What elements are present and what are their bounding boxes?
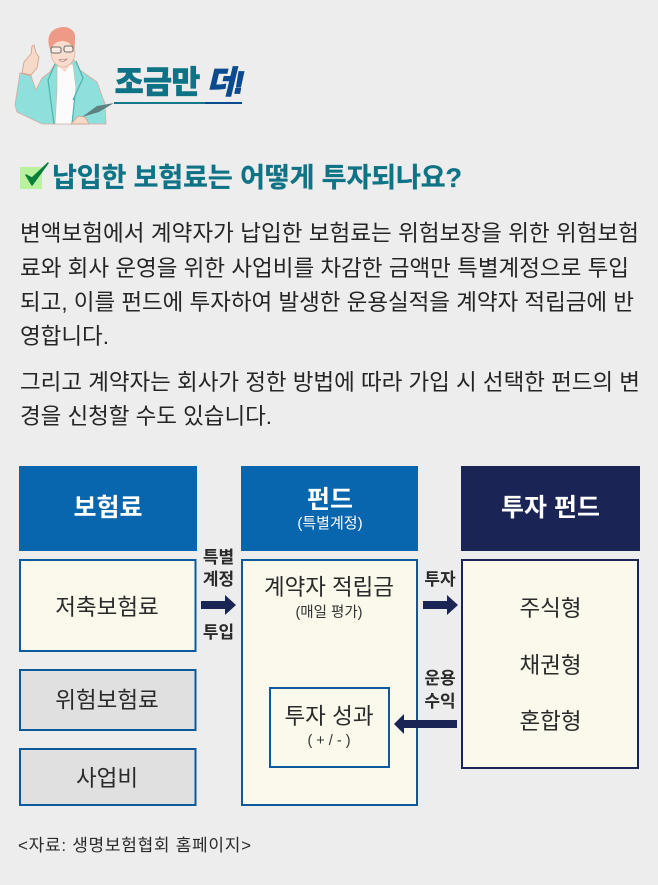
box: 투자 성과: 투자 성과 — [284, 704, 374, 729]
arrow: returns — [394, 714, 457, 734]
text block: paragraph 1: 료와 회사 운영을 위한 사업비를 차감한 금액만 특별계정으로 투입 — [20, 256, 629, 281]
label: 운용수익: 운용 — [424, 669, 456, 688]
box: 투자 성과: ( + / - ) — [307, 733, 351, 749]
header: 보험료 — [19, 466, 197, 551]
box: 저축보험료 — [20, 560, 196, 651]
header: 펀드: 펀드 — [307, 486, 353, 514]
arrow: to investment funds — [423, 595, 458, 615]
header: 펀드: (특별계정) — [297, 515, 363, 532]
label: 운용수익: 수익 — [424, 692, 456, 711]
box: 투자 성과 — [270, 688, 389, 767]
icon: green check mark — [20, 163, 48, 189]
box: 투자 펀드 종류: 채권형 — [519, 653, 582, 678]
box: 위험보험료 — [20, 670, 196, 730]
header: 펀드 — [241, 466, 418, 551]
label: 특별계정: 특별 — [203, 548, 234, 567]
box: 사업비: 사업비 — [76, 766, 138, 791]
text block: paragraph 1: 변액보험에서 계약자가 납입한 보험료는 위험보장을 위한 위험보험 — [20, 221, 639, 246]
box: 계약자 적립금 — [242, 560, 417, 805]
text block: paragraph 2 — [20, 370, 640, 429]
source note: <자료: 생명보험협회 홈페이지> — [18, 836, 251, 855]
title: 조금만 더! — [114, 65, 244, 104]
label: 특별계정 — [203, 548, 234, 589]
title: 조금만 더!: 조금만 — [115, 65, 200, 100]
icon: man pointing with tablet — [15, 27, 114, 124]
header: 투자 펀드: 투자 펀드 — [501, 494, 600, 522]
heading: 납입한 보험료는 어떻게 투자되나요? — [52, 163, 462, 193]
text block: paragraph 1 — [20, 221, 639, 349]
text block: paragraph 1: 영합니다. — [20, 324, 109, 349]
label: 특별계정: 계정 — [203, 570, 234, 589]
text block: paragraph 2: 그리고 계약자는 회사가 정한 방법에 따라 가입 시 선택한 펀드의 변 — [20, 370, 640, 395]
box: 계약자 적립금: 계약자 적립금 — [264, 575, 394, 600]
arrow: to fund — [201, 595, 236, 615]
text block: paragraph 2: 경을 신청할 수도 있습니다. — [20, 404, 272, 429]
box: 투자 펀드 종류: 혼합형 — [519, 709, 582, 734]
box: 사업비 — [20, 749, 196, 805]
box: 투자 펀드 종류: 주식형 — [519, 596, 582, 621]
box: 계약자 적립금: (매일 평가) — [295, 604, 363, 621]
box: 위험보험료: 위험보험료 — [55, 688, 159, 713]
title: 조금만 더!: 더! — [207, 65, 244, 100]
label: 투자: 투자 — [424, 570, 456, 589]
text block: paragraph 1: 되고, 이를 펀드에 투자하여 발생한 운용실적을 계약자 적립금에 반 — [20, 290, 634, 315]
box: 투자 펀드 종류 — [462, 560, 638, 768]
header: 투자 펀드 — [461, 466, 640, 551]
header: 보험료: 보험료 — [73, 494, 143, 522]
label: 운용수익 — [424, 669, 456, 711]
label: 투입: 투입 — [203, 623, 234, 642]
box: 저축보험료: 저축보험료 — [55, 595, 159, 620]
